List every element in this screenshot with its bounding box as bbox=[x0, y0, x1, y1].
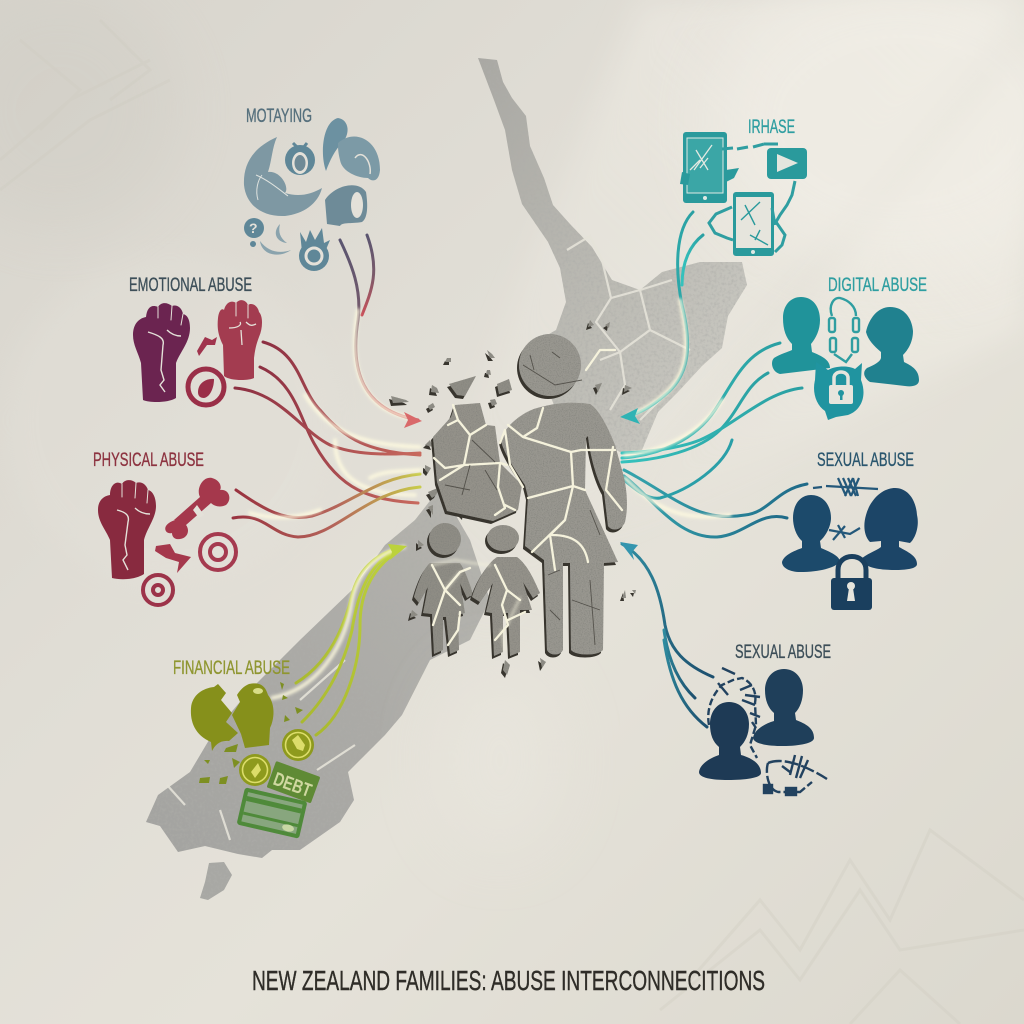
group: Motaying bbox=[244, 106, 380, 271]
icon: fragment bbox=[197, 337, 217, 356]
figure: shattered family bbox=[391, 320, 636, 675]
icon: barbed wire halo bbox=[708, 668, 760, 758]
group: Digital abuse bbox=[772, 275, 927, 420]
icon: person right bbox=[864, 307, 919, 386]
icon: fragments bbox=[199, 682, 303, 784]
icon: cracked fist bbox=[98, 480, 156, 579]
label: Sexual abuse upper: SEXUAL ABUSE bbox=[817, 450, 914, 471]
group: Emotional abuse bbox=[129, 275, 262, 405]
icon: cracked phone large bbox=[680, 132, 739, 203]
icon: broken bone bbox=[165, 478, 229, 539]
label: Motaying: MOTAYING bbox=[246, 106, 312, 127]
label: Physical abuse: PHYSICAL ABUSE bbox=[93, 450, 204, 471]
debris bbox=[391, 320, 636, 675]
icon: video tile bbox=[767, 148, 807, 179]
title: NEW ZEALAND FAMILIES: ABUSE INTERCONNECITIONS bbox=[252, 965, 765, 996]
icon: swirling faces: ? bbox=[249, 220, 258, 236]
arrows: Motaying bbox=[340, 235, 422, 428]
map: South Island bbox=[146, 488, 490, 858]
icon: barbed wire bbox=[813, 478, 878, 540]
group: Irhase bbox=[680, 117, 807, 256]
label: Digital abuse: DIGITAL ABUSE bbox=[828, 275, 927, 296]
map: Stewart Island bbox=[200, 862, 232, 900]
label: Sexual abuse lower: SEXUAL ABUSE bbox=[735, 642, 831, 663]
icon: coins bbox=[239, 729, 314, 786]
map: New Zealand bbox=[146, 58, 747, 900]
body: shattered man bbox=[433, 403, 522, 521]
icon: shard bolt bbox=[155, 544, 191, 573]
arrows: Irhase bbox=[620, 212, 703, 424]
child: right bbox=[472, 525, 540, 656]
icon: barbed wire lower bbox=[764, 755, 827, 795]
group: Financial abuse bbox=[173, 658, 320, 839]
icon: person left bbox=[772, 297, 830, 374]
label: Emotional abuse: EMOTIONAL ABUSE bbox=[129, 275, 252, 296]
label: Financial abuse: FINANCIAL ABUSE bbox=[173, 658, 290, 679]
icon: target lower bbox=[143, 575, 173, 605]
icon: target with drop bbox=[188, 369, 224, 405]
body: woman bbox=[501, 403, 627, 654]
arrows: Physical abuse bbox=[233, 470, 420, 537]
group: Sexual abuse lower bbox=[699, 642, 831, 795]
icon: person back bbox=[753, 669, 814, 746]
icon: debt tag bbox=[267, 761, 320, 803]
child: left bbox=[414, 523, 473, 654]
map: North Island bbox=[478, 58, 747, 452]
group: Physical abuse bbox=[93, 450, 236, 605]
glowing cracks bbox=[432, 350, 622, 650]
icon: chain loop bbox=[829, 298, 859, 362]
icon: cracked fist dark bbox=[133, 303, 190, 402]
icon: person left bbox=[782, 495, 840, 572]
arrows: Emotional abuse bbox=[235, 342, 420, 503]
arrows: Digital abuse bbox=[622, 343, 802, 462]
icon: chains bbox=[709, 144, 795, 252]
icon: lock bubble bbox=[814, 362, 863, 420]
icon: cracked fist red bbox=[218, 300, 262, 380]
icon: cracked phone small bbox=[733, 192, 774, 256]
flows: converging lines bbox=[233, 212, 807, 735]
icon: swirling faces bbox=[244, 118, 380, 271]
icon: broken piggy bank bbox=[191, 683, 274, 751]
icon: credit card bbox=[237, 787, 307, 839]
group: Sexual abuse upper bbox=[782, 450, 918, 610]
map: fault lines bbox=[167, 236, 690, 840]
arrows: Sexual abuse upper bbox=[624, 440, 807, 537]
icon: person front bbox=[699, 702, 761, 780]
arrows: Sexual abuse lower bbox=[620, 542, 713, 727]
arrows: Financial abuse bbox=[272, 544, 407, 735]
head: woman bbox=[519, 334, 581, 396]
icon: padlock bbox=[831, 556, 872, 610]
icon: debt tag: DEBT bbox=[270, 769, 314, 802]
icon: target right bbox=[200, 534, 236, 570]
label: Irhase: IRHASE bbox=[748, 117, 795, 138]
icon: person right bbox=[860, 488, 918, 570]
